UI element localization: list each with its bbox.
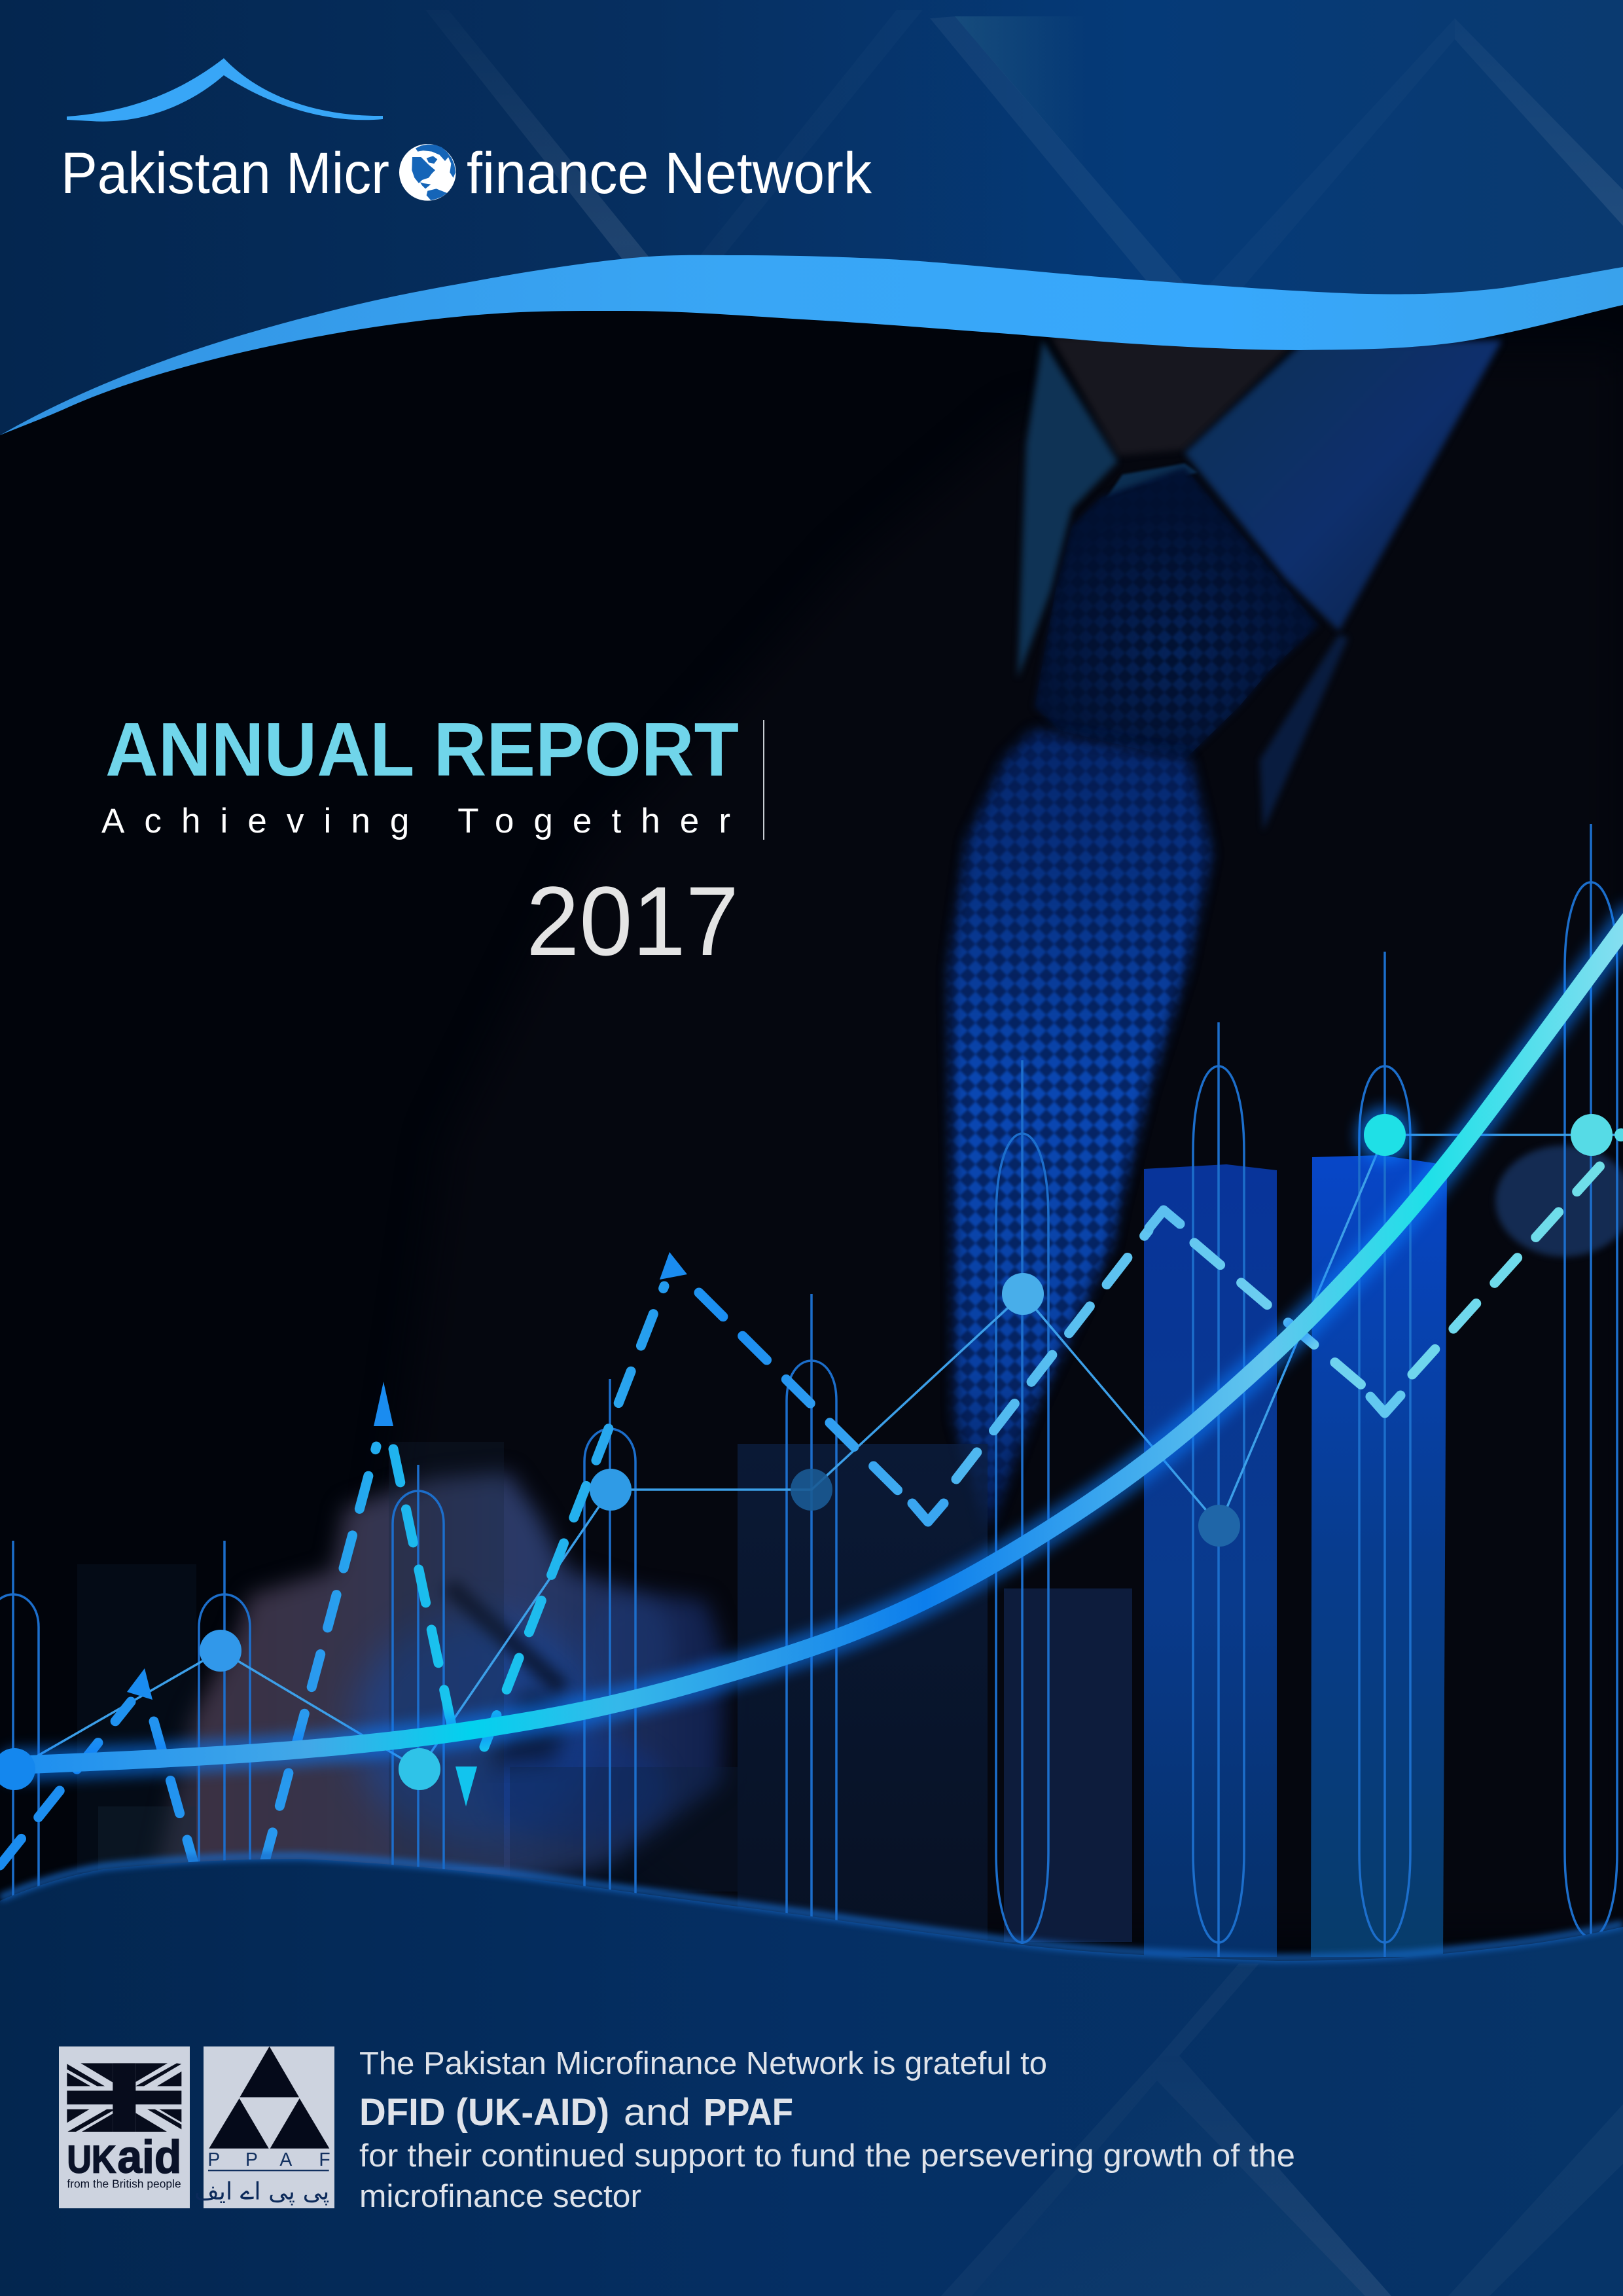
acknowledgement text: The Pakistan Microfinance Network is grateful to <box>359 2046 1047 2081</box>
capsule grid lines <box>0 824 1617 1957</box>
urdu name: پی پی اے ایف <box>194 2178 329 2206</box>
growth curve <box>14 920 1623 1765</box>
bars <box>77 1155 1447 1957</box>
acknowledgement text: PPAF <box>704 2091 793 2134</box>
top diamond pattern <box>425 10 1623 340</box>
acknowledgement text: and <box>624 2091 690 2134</box>
neck <box>1051 336 1302 456</box>
icon: triangles <box>209 2047 329 2149</box>
data points <box>0 1106 1623 1790</box>
logo: UK aid <box>59 2046 190 2208</box>
vertical rule <box>763 720 764 840</box>
icon: roof <box>67 58 383 122</box>
letters <box>207 2149 330 2170</box>
dark photo panel <box>0 285 1623 1964</box>
shirt left collar <box>1018 340 1118 678</box>
logo: PPAF <box>194 2046 334 2208</box>
report title <box>101 707 764 976</box>
thin data line <box>14 1135 1623 1769</box>
letters: P <box>207 2149 220 2170</box>
tie blade pattern <box>942 726 1216 1518</box>
lapel edge <box>1260 634 1348 831</box>
acknowledgement text: microfinance sector <box>359 2179 641 2214</box>
strapline: from the British people <box>67 2177 181 2190</box>
organisation name right: finance Network <box>467 140 872 206</box>
letters: A <box>279 2149 292 2170</box>
heading: ANNUAL REPORT <box>105 707 739 792</box>
businessman: suit <box>366 353 1623 1937</box>
blue swoosh <box>0 255 1623 435</box>
organisation name left: Pakistan Micr <box>61 140 389 206</box>
bottom panel <box>0 1856 1623 2296</box>
acknowledgement text: DFID (UK-AID) <box>359 2091 609 2134</box>
letters: F <box>319 2149 330 2170</box>
icon: union flag <box>67 2063 181 2132</box>
tagline: Achieving Together <box>101 802 730 840</box>
icon: globe <box>399 144 456 201</box>
acknowledgement text <box>359 2046 1295 2214</box>
tie knot pattern <box>1048 530 1294 754</box>
tie knot base <box>1035 467 1319 760</box>
acknowledgement text: for their continued support to fund the persevering growth of the <box>359 2138 1295 2174</box>
arrowheads <box>127 1210 1400 1806</box>
shirt right collar <box>1185 340 1502 631</box>
letters: P <box>245 2149 258 2170</box>
collar band <box>1106 463 1198 499</box>
top blue background <box>0 0 1623 497</box>
PMN logo <box>61 58 872 206</box>
fingertip <box>1495 1145 1623 1257</box>
logo: UK aid: aid <box>117 2130 181 2182</box>
wave rim glow <box>0 1856 1623 1958</box>
dashed trend line <box>0 1157 1609 1865</box>
tie blade base <box>951 730 1210 1532</box>
bottom diamond pattern <box>941 1964 1623 2296</box>
wordmark: UK <box>67 2137 116 2181</box>
year: 2017 <box>526 866 739 976</box>
hand <box>151 1473 726 1898</box>
